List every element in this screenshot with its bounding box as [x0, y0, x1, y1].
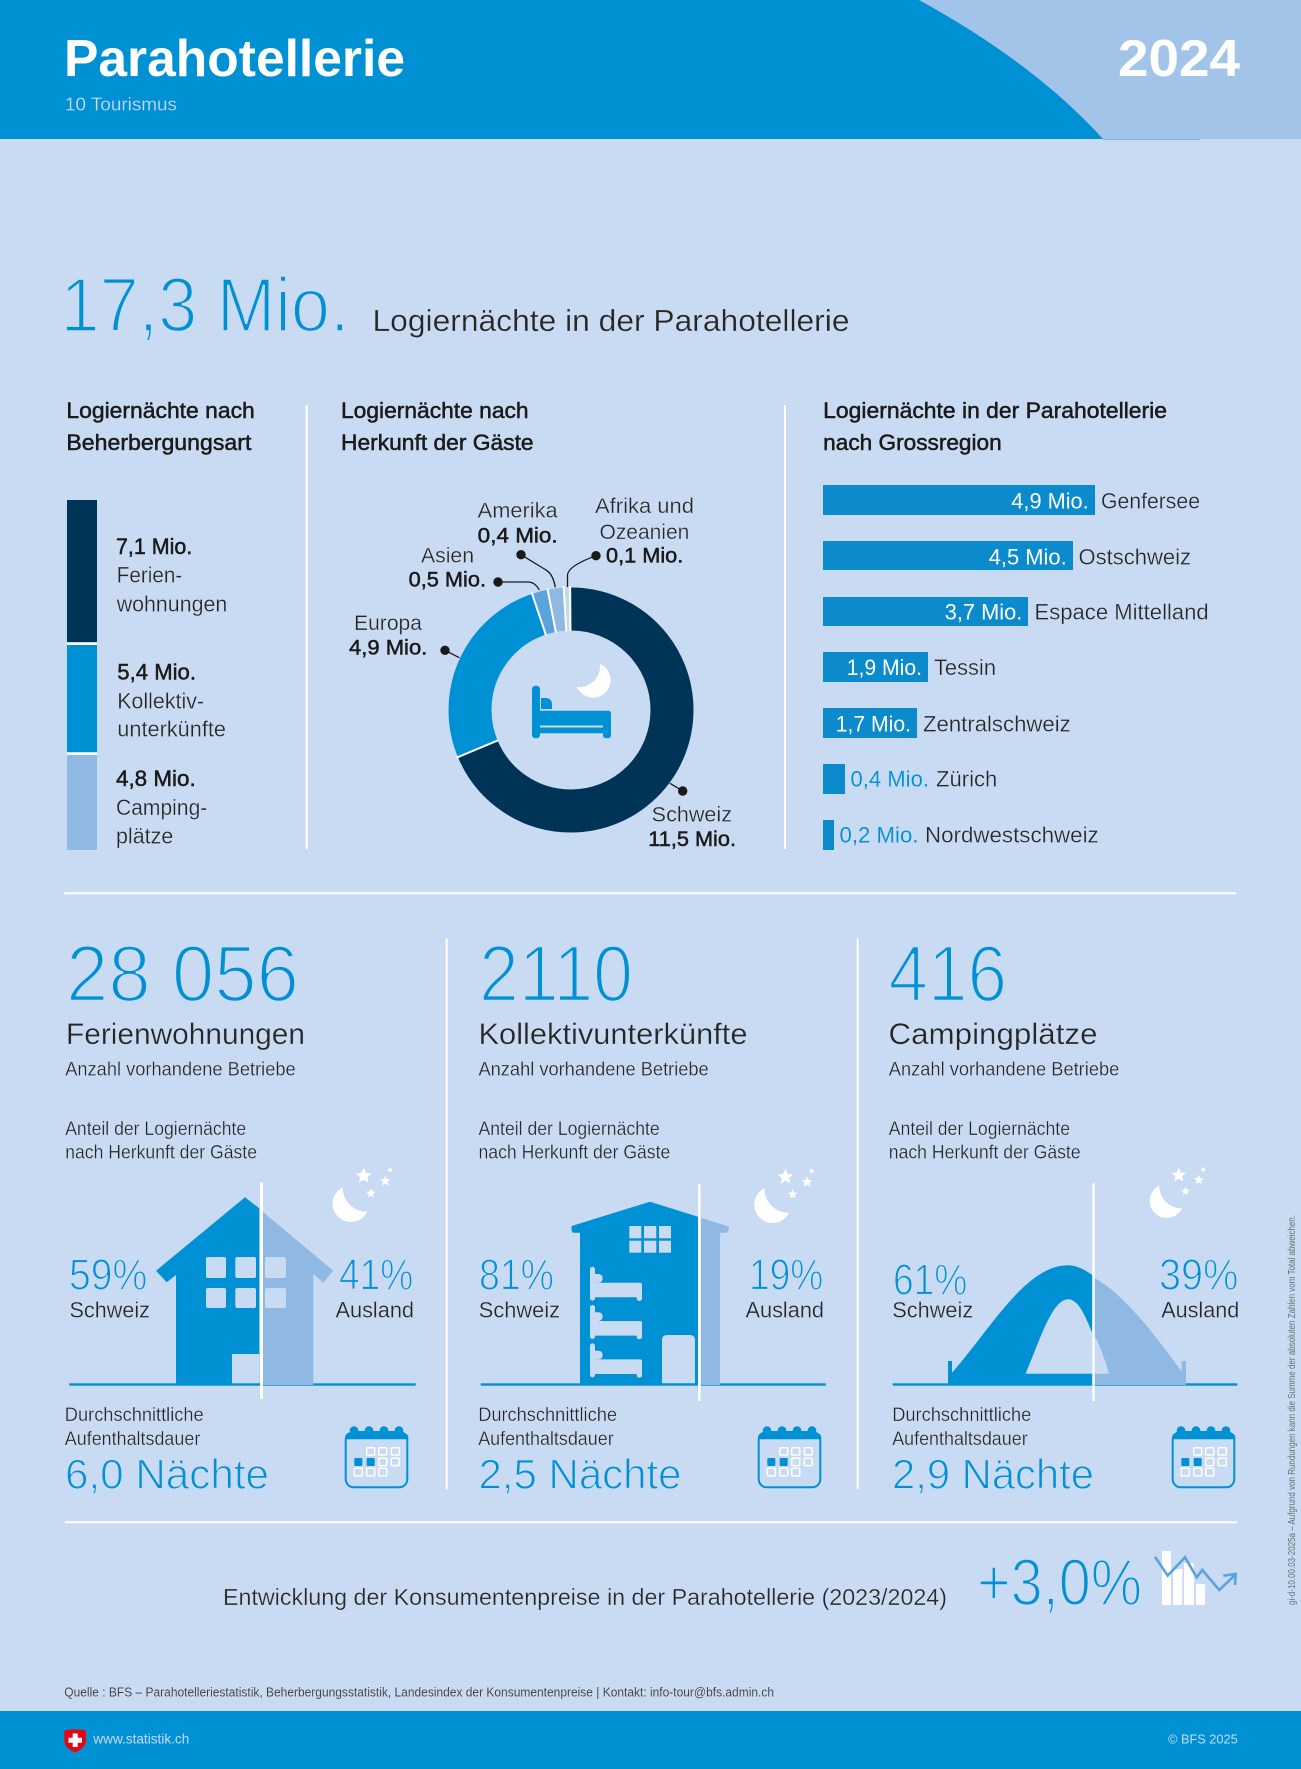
stat: 59% Schweiz — [69, 1250, 150, 1323]
key figure: total overnight stays — [60, 262, 850, 348]
icon: bars and trend arrow — [1155, 1551, 1236, 1605]
panel: Ferienwohnungen — [65, 929, 416, 1497]
figure: +3,0%: +3,0% — [977, 1545, 1142, 1619]
heading: accommodation type — [66, 398, 255, 455]
stat: average stay: Durchschnittliche — [478, 1404, 617, 1426]
label: Europa: Europa — [354, 612, 422, 635]
stat: 19% Ausland: Ausland — [746, 1298, 824, 1323]
figure: 28 056: 28 056 — [66, 929, 299, 1018]
bar: Genfersee — [823, 485, 1200, 515]
text: consumer price development: Entwicklung der Konsumentenpreise in der Parahotellerie (2023/2024) — [223, 1584, 947, 1610]
label: Ferienwohnungen: 7,1 Mio. — [116, 534, 192, 559]
stat: average stay — [892, 1404, 1094, 1497]
bar: Nordwestschweiz: Nordwestschweiz — [925, 822, 1099, 847]
label: Asien: Asien — [421, 545, 474, 568]
donut chart — [457, 586, 672, 811]
stat: 39% Ausland: 39% — [1159, 1250, 1238, 1299]
footer bar — [0, 1711, 1301, 1769]
label: Schweiz — [648, 804, 736, 851]
label: Schweiz: 11,5 Mio. — [648, 828, 736, 851]
side note: gi-d-10.00.03-2025a – Aufgrund von Rundungen kann die Summe der absoluten Zahlen vom Total abweichen. — [1286, 1215, 1298, 1605]
subtitle: 10 Tourismus — [65, 95, 177, 115]
heading: major regions — [823, 398, 1167, 455]
bar: Tessin — [823, 652, 996, 682]
stat: average stay — [65, 1404, 269, 1497]
label: Afrika und Ozeanien: Afrika und — [595, 495, 694, 518]
panel: origin of guests — [341, 398, 736, 851]
text: share intro: Anteil der Logiernächte — [65, 1118, 246, 1140]
text: existing establishments: Anzahl vorhandene Betriebe — [889, 1058, 1119, 1080]
figure: 2110: 2110 — [479, 929, 633, 1018]
label: Afrika und Ozeanien: 0,1 Mio. — [606, 545, 683, 568]
stacked bar — [67, 500, 97, 850]
icon: moon and stars — [333, 1167, 393, 1222]
stat: 61% Schweiz: 61% — [893, 1255, 967, 1304]
bar: Zentralschweiz: 1,7 Mio. — [836, 711, 911, 736]
icon: calendar — [1172, 1426, 1235, 1487]
bar: Espace Mittelland: Espace Mittelland — [1034, 600, 1209, 625]
label: Kollektivunterkünfte: unterkünfte — [117, 717, 226, 742]
icon: tent split — [893, 1183, 1237, 1401]
icon: calendar — [345, 1426, 408, 1487]
leader lines — [440, 550, 687, 796]
label: Afrika und Ozeanien: Ozeanien — [600, 521, 689, 544]
text: share intro: nach Herkunft der Gäste — [889, 1141, 1081, 1163]
stat: 39% Ausland — [1159, 1250, 1239, 1323]
bar: Ostschweiz — [823, 541, 1191, 570]
label: Amerika: 0,4 Mio. — [478, 525, 558, 548]
stat: average stay: Aufenthaltsdauer — [65, 1428, 201, 1450]
label: Ferienwohnungen: Ferien- — [117, 563, 182, 588]
bar: Zentralschweiz: Zentralschweiz — [923, 711, 1071, 736]
stat: 19% Ausland: 19% — [749, 1250, 823, 1299]
label: Campingplätze — [116, 766, 207, 848]
label: Amerika: Amerika — [478, 500, 558, 523]
bar: Zürich: Zürich — [936, 767, 997, 792]
stat: 81% Schweiz: 81% — [479, 1250, 554, 1299]
text: share intro: Anteil der Logiernächte — [478, 1118, 660, 1140]
label: Europa — [349, 612, 427, 660]
bar: Zürich: 0,4 Mio. — [850, 767, 929, 792]
heading: origin of guests — [341, 398, 534, 455]
heading: origin of guests: Logiernächte nach — [341, 398, 529, 423]
text: share intro: nach Herkunft der Gäste — [65, 1141, 257, 1163]
stat: 19% Ausland — [746, 1250, 824, 1323]
title: Parahotellerie — [64, 30, 405, 88]
label: Kollektivunterkünfte: 5,4 Mio. — [117, 659, 196, 684]
bar: Genfersee: 4,9 Mio. — [1011, 488, 1089, 513]
label: Ferienwohnungen: wohnungen — [116, 592, 227, 617]
stat: 41% Ausland — [336, 1250, 414, 1323]
key figure caption: Logiernächte in der Parahotellerie — [372, 303, 850, 338]
icon: moon and stars — [1150, 1167, 1206, 1218]
bar: Espace Mittelland — [823, 597, 1209, 626]
label: Campingplätze: 4,8 Mio. — [116, 766, 196, 791]
bar: Tessin: Tessin — [934, 655, 996, 680]
bar: Ostschweiz: Ostschweiz — [1078, 544, 1191, 569]
header banner — [0, 0, 1301, 140]
bar: Espace Mittelland: 3,7 Mio. — [945, 600, 1022, 625]
icon: calendar — [758, 1426, 821, 1487]
heading: major regions: Logiernächte in der Parahotellerie — [823, 398, 1167, 423]
heading: accommodation type: Logiernächte nach — [66, 398, 255, 423]
stat: 59% Schweiz: Schweiz — [70, 1298, 150, 1323]
label: Campingplätze: Camping- — [116, 795, 207, 820]
stat: average stay: Durchschnittliche — [892, 1404, 1031, 1426]
stat: 41% Ausland: 41% — [339, 1250, 413, 1299]
icon: Swiss shield — [64, 1729, 86, 1752]
stat: 59% Schweiz: 59% — [69, 1250, 147, 1299]
label: Kollektivunterkünfte: Kollektiv- — [117, 688, 204, 713]
icon: house split — [69, 1182, 416, 1399]
text: share intro: nach Herkunft der Gäste — [478, 1141, 670, 1163]
figure: 416: 416 — [888, 929, 1007, 1018]
heading: Campingplätze: Campingplätze — [888, 1018, 1098, 1051]
label: Kollektivunterkünfte — [117, 659, 226, 742]
website: www.statistik.ch — [92, 1730, 189, 1746]
stat: 61% Schweiz — [892, 1255, 973, 1323]
label: Afrika und Ozeanien — [595, 495, 694, 568]
bar: Zürich — [823, 764, 997, 794]
text: existing establishments: Anzahl vorhandene Betriebe — [478, 1058, 709, 1080]
label: Campingplätze: plätze — [116, 823, 173, 848]
panel: Kollektivunterkünfte — [478, 929, 826, 1497]
label: Schweiz: Schweiz — [652, 804, 732, 827]
stat: 81% Schweiz — [479, 1250, 560, 1323]
bar: Ostschweiz: 4,5 Mio. — [989, 544, 1067, 569]
stat: average stay: Aufenthaltsdauer — [892, 1428, 1028, 1450]
source note: Quelle : BFS – Parahotelleriestatistik, Beherbergungsstatistik, Landesindex der Konsumentenpreise | Kontakt: info-tour@bfs.admin.ch — [64, 1685, 774, 1700]
text: share intro: Anteil der Logiernächte — [889, 1118, 1070, 1140]
stat: average stay: 2,5 Nächte — [478, 1450, 682, 1497]
label: Asien — [409, 545, 486, 592]
text: existing establishments: Anzahl vorhandene Betriebe — [65, 1058, 296, 1080]
icon: bed with moon — [532, 664, 611, 738]
heading: origin of guests: Herkunft der Gäste — [341, 430, 534, 455]
stat: average stay: 6,0 Nächte — [65, 1450, 269, 1497]
label: Amerika — [478, 500, 558, 548]
bar: Nordwestschweiz — [823, 820, 1099, 850]
heading: Ferienwohnungen: Ferienwohnungen — [66, 1018, 305, 1051]
stat: 81% Schweiz: Schweiz — [479, 1298, 560, 1323]
bar: Zentralschweiz — [823, 708, 1071, 738]
icon: moon and stars — [754, 1168, 815, 1223]
heading: accommodation type: Beherbergungsart — [66, 430, 251, 455]
copyright: © BFS 2025 — [1168, 1731, 1238, 1746]
bar: Genfersee: Genfersee — [1101, 488, 1200, 513]
stat: average stay: Durchschnittliche — [65, 1404, 204, 1426]
text: share intro — [478, 1118, 670, 1163]
icon: hostel building split — [481, 1184, 826, 1401]
label: Europa: 4,9 Mio. — [349, 637, 427, 660]
panel: major regions — [823, 398, 1209, 850]
stat: 41% Ausland: Ausland — [336, 1298, 414, 1323]
key figure: total overnight stays: 17,3 Mio. — [60, 262, 350, 348]
panel: Campingplätze — [888, 929, 1239, 1497]
bar: Tessin: 1,9 Mio. — [847, 655, 922, 680]
heading: major regions: nach Grossregion — [823, 430, 1002, 455]
panel: accommodation type — [66, 398, 255, 850]
heading: Kollektivunterkünfte: Kollektivunterkünfte — [478, 1018, 748, 1051]
panel: consumer prices — [223, 1545, 1236, 1619]
label: Ferienwohnungen — [116, 534, 227, 617]
label: Asien: 0,5 Mio. — [409, 569, 486, 592]
stat: 61% Schweiz: Schweiz — [892, 1298, 973, 1323]
text: share intro — [889, 1118, 1081, 1163]
stat: average stay: 2,9 Nächte — [892, 1450, 1094, 1497]
year: 2024 — [1118, 30, 1240, 88]
bar: Nordwestschweiz: 0,2 Mio. — [840, 822, 918, 847]
stat: average stay — [478, 1404, 682, 1497]
stat: 39% Ausland: Ausland — [1161, 1298, 1239, 1323]
text: share intro — [65, 1118, 257, 1163]
stat: average stay: Aufenthaltsdauer — [478, 1428, 614, 1450]
